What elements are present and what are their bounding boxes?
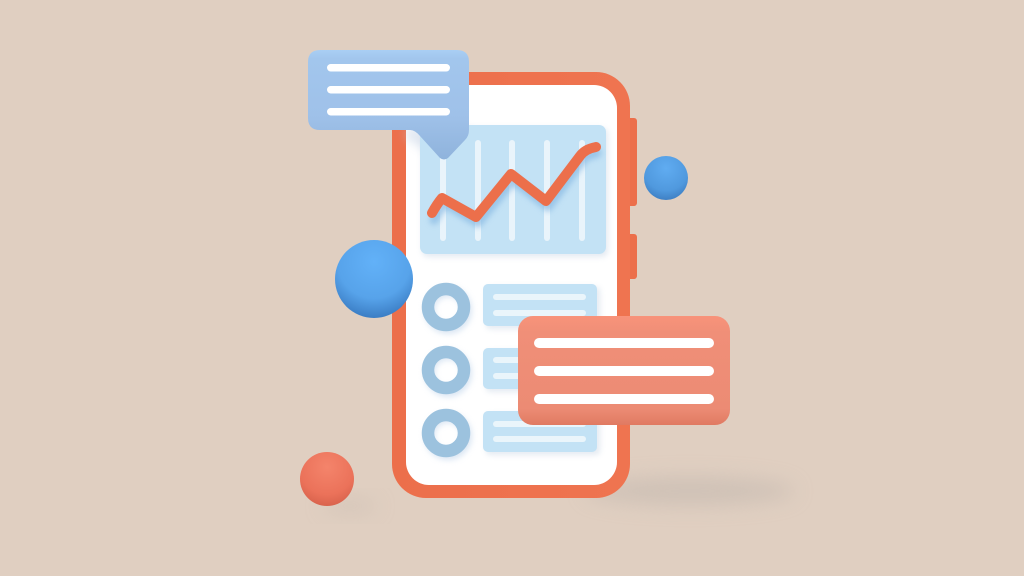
card text lines — [534, 338, 714, 404]
list row 2 — [428, 348, 600, 392]
line chart — [432, 147, 596, 217]
phone body — [392, 72, 630, 498]
phone screen — [406, 85, 617, 485]
message card: orange — [518, 316, 730, 425]
donut icon — [428, 415, 464, 451]
list row 3 — [428, 411, 600, 455]
donut icon — [428, 289, 464, 325]
sphere: small blue — [644, 156, 688, 200]
list row 1 — [428, 284, 600, 329]
chart panel — [420, 125, 608, 257]
ground shadow: orange ball — [322, 500, 378, 512]
speech bubble: blue — [308, 50, 469, 160]
bubble shadow on screen — [406, 128, 468, 166]
phone side buttons — [624, 118, 637, 279]
line chart shadow — [434, 153, 597, 223]
ground shadow: phone — [585, 477, 795, 505]
sphere: orange — [300, 452, 354, 506]
donut icon — [428, 352, 464, 388]
sphere: large blue — [335, 240, 413, 318]
bubble text lines — [327, 64, 450, 116]
chart grid bars — [440, 140, 585, 241]
